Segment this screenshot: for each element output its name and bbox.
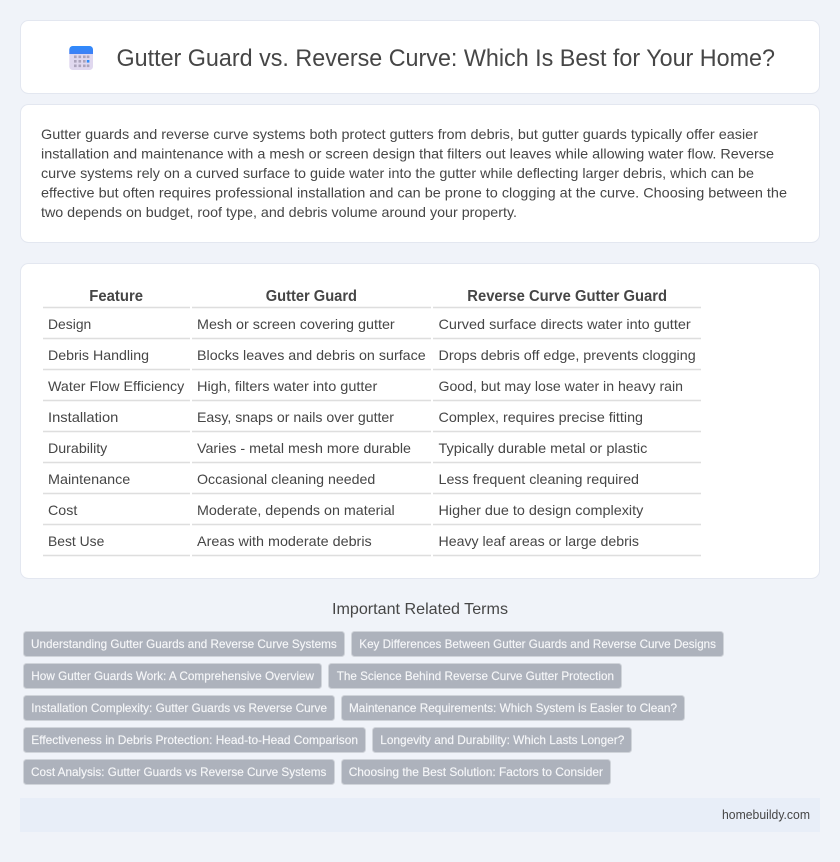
table row: water flow efficiency: Good, but may lose water in heavy rain (438, 378, 683, 394)
table row: maintenance (48, 471, 639, 487)
table row: durability (48, 440, 647, 456)
tag: effectiveness (24, 728, 366, 752)
table row: cost: Moderate, depends on material (197, 502, 395, 518)
table row: water flow efficiency (48, 378, 683, 394)
tag: understanding (24, 632, 344, 656)
table row: maintenance: Maintenance (48, 471, 131, 487)
table row: durability: Varies - metal mesh more durable (197, 440, 411, 456)
table row: best use (48, 533, 639, 549)
table row: installation: Complex, requires precise fitting (438, 409, 643, 425)
table row: durability: Typically durable metal or plastic (438, 440, 647, 456)
table row: best use: Areas with moderate debris (197, 533, 372, 549)
tag: choosing: Choosing the Best Solution: Factors to Consider (349, 765, 603, 779)
footer (20, 798, 820, 832)
tag: the science (328, 664, 622, 688)
table header: Gutter Guard (266, 288, 357, 305)
table row: design: Design (48, 316, 91, 332)
text block: introduction paragraph: installation and maintenance with a mesh or screen design that filters out leaves while allowing water flow. Reverse (41, 146, 774, 162)
table row: installation: Easy, snaps or nails over gutter (197, 409, 394, 425)
tag: longevity: Longevity and Durability: Which Lasts Longer? (380, 733, 625, 747)
table row: debris handling (48, 347, 696, 363)
text block: introduction paragraph: Gutter guards and reverse curve systems both protect gutters from debris, but gutter guards typically offer easier (41, 126, 758, 142)
table row: cost: Higher due to design complexity (438, 502, 643, 518)
tag: cost analysis: Cost Analysis: Gutter Guards vs Reverse Curve Systems (31, 765, 326, 779)
table row: design (48, 316, 691, 332)
tag: how gutter guards work: How Gutter Guards Work: A Comprehensive Overview (31, 669, 314, 683)
tag: cost analysis (24, 760, 334, 784)
table header: Feature (89, 288, 143, 305)
panel: related term tags (24, 632, 724, 784)
table header (89, 288, 667, 305)
tag: key differences: Key Differences Between Gutter Guards and Reverse Curve Designs (359, 637, 716, 651)
table row: debris handling: Debris Handling (48, 347, 149, 363)
table row: cost: Cost (48, 502, 77, 518)
text block: introduction paragraph (41, 126, 787, 220)
tag: installation complexity (24, 696, 334, 720)
panel: comparison table (20, 264, 820, 578)
tag: choosing (342, 760, 610, 784)
table row: best use: Best Use (48, 533, 104, 549)
table row: best use: Heavy leaf areas or large debris (438, 533, 639, 549)
footer source text: homebuildy.com (722, 808, 810, 822)
tag: key differences (352, 632, 724, 656)
tag: understanding: Understanding Gutter Guards and Reverse Curve Systems (31, 637, 337, 651)
icon: calendar (69, 46, 93, 70)
tag: how gutter guards work (24, 664, 322, 688)
tag: effectiveness: Effectiveness in Debris Protection: Head-to-Head Comparison (31, 733, 358, 747)
tag: maintenance requirements (342, 696, 684, 720)
table row: water flow efficiency: High, filters water into gutter (197, 378, 378, 394)
table row: durability: Durability (48, 440, 107, 456)
panel: title header (20, 20, 820, 94)
table row: installation (48, 409, 643, 425)
table row: water flow efficiency: Water Flow Efficiency (48, 378, 184, 394)
text block: introduction paragraph: effective but often requires professional installation and can be prone to clogging at the curve. Choosing between the (41, 184, 787, 200)
table row: maintenance: Less frequent cleaning required (438, 471, 639, 487)
text block: introduction paragraph: two depends on budget, roof type, and debris volume around your property. (41, 204, 517, 220)
table row: maintenance: Occasional cleaning needed (197, 471, 375, 487)
table header: Reverse Curve Gutter Guard (467, 288, 667, 305)
table row: debris handling: Drops debris off edge, prevents clogging (438, 347, 696, 363)
tag: maintenance requirements: Maintenance Requirements: Which System is Easier to Clean? (349, 701, 677, 715)
panel: introduction (20, 104, 820, 242)
table row: installation: Installation (48, 409, 118, 425)
tag: longevity (372, 728, 632, 752)
table row: cost (48, 502, 643, 518)
heading: important related terms: Important Related Terms (332, 601, 508, 618)
tag: installation complexity: Installation Complexity: Gutter Guards vs Reverse Curve (31, 701, 327, 715)
text block: introduction paragraph: curve systems rely on a curved surface to guide water into the gutter while deflecting larger debris, which can be (41, 165, 754, 181)
title: Gutter Guard vs. Reverse Curve: Which Is Best for Your Home? (116, 45, 775, 72)
table row: debris handling: Blocks leaves and debris on surface (197, 347, 426, 363)
table row: design: Curved surface directs water into gutter (438, 316, 691, 332)
tag: the science: The Science Behind Reverse Curve Gutter Protection (337, 669, 614, 683)
table row: design: Mesh or screen covering gutter (197, 316, 395, 332)
